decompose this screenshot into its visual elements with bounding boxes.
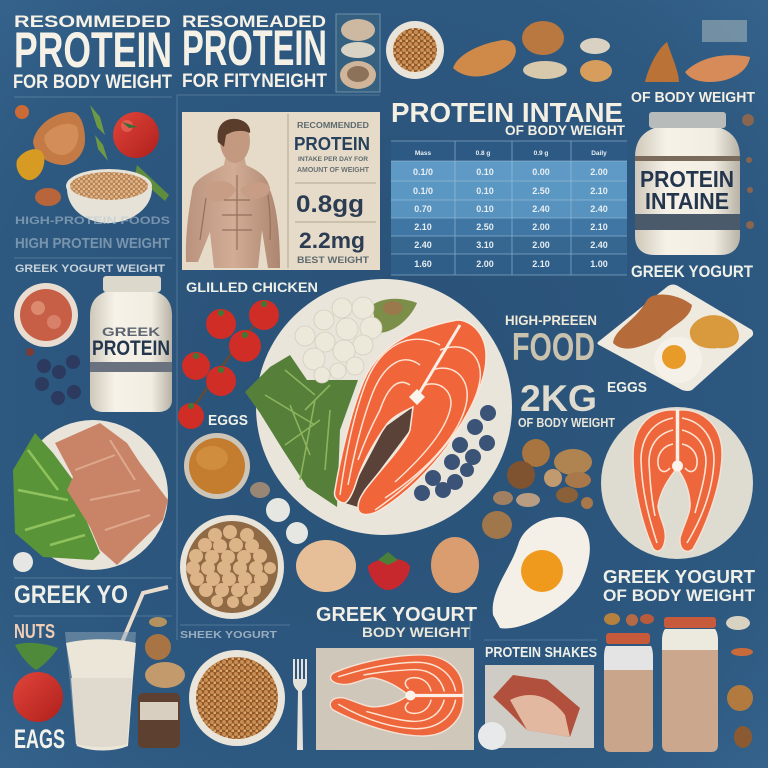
- table: protein intake: 2.00: [590, 167, 608, 177]
- table: protein intake: 2.00: [532, 240, 550, 250]
- table: protein intake: 0.8 g: [476, 150, 490, 157]
- jar: greek protein: PROTEIN: [92, 337, 170, 360]
- heading: recommended protein for body weight: [13, 12, 172, 93]
- jar: greek protein: GREEK: [102, 325, 160, 339]
- divider lines: [14, 95, 597, 640]
- panel: meat photo card: [478, 665, 594, 750]
- small badges: [13, 498, 308, 572]
- table: protein intake: 0.10: [476, 186, 494, 196]
- food: cherry tomatoes on vine: [178, 300, 279, 429]
- table: protein intake: 0.00: [532, 167, 550, 177]
- label: high-protein food: [505, 312, 597, 369]
- label: 2 kg of body weight: 2KG: [520, 378, 597, 419]
- table: protein intake: 0.70: [414, 204, 432, 214]
- card text: BEST WEIGHT: [297, 255, 370, 265]
- table: protein intake: 0.1/0: [413, 186, 433, 196]
- label: of body weight top right: OF BODY WEIGHT: [631, 89, 755, 106]
- food: meat with greens plate: [13, 420, 168, 570]
- food: blueberries: [26, 348, 81, 405]
- label: 2 kg of body weight: [518, 378, 615, 430]
- food: lentil bowl: [189, 650, 285, 746]
- jar: protein intake: PROTEIN: [640, 166, 734, 192]
- food: fried egg: [493, 517, 590, 628]
- table: protein intake: 2.10: [414, 222, 432, 232]
- table: protein intake: 0.1/0: [413, 167, 433, 177]
- table: protein intake: 2.40: [414, 240, 432, 250]
- card text: PROTEIN: [294, 134, 370, 154]
- food: salmon steak plate: [601, 407, 753, 559]
- panel: athlete protein card: [182, 112, 380, 270]
- jar: greek protein: [90, 276, 172, 412]
- blueberries: [414, 405, 496, 501]
- label: greek yogurt of body weight: [603, 567, 756, 605]
- label: greek weight: GREEK YOGURT WEIGHT: [15, 263, 165, 275]
- mozzarella: [295, 297, 382, 383]
- label: eags: EAGS: [14, 724, 65, 754]
- food: apple with leaves: [13, 643, 63, 722]
- table: protein intake: Mass: [415, 150, 432, 157]
- heading: recommended protein for fitness: PROTEIN: [182, 20, 327, 76]
- panel: salmon fillet card: [316, 648, 474, 750]
- table: protein intake: 2.00: [532, 222, 550, 232]
- panel: foods and grain bowl: [15, 105, 169, 223]
- heading: recommended protein for body weight: PROTEIN: [14, 22, 172, 78]
- food: honey cup: [184, 433, 250, 499]
- jar: protein intake: INTAINE: [645, 188, 729, 214]
- food: whole eggs and strawberry: [296, 537, 479, 593]
- panel: small food strip: [336, 14, 380, 92]
- table: protein intake: 2.50: [532, 186, 550, 196]
- table: protein intake: 2.10: [590, 186, 608, 196]
- food: small nuts above jars: [604, 613, 654, 626]
- side decoration: [742, 114, 754, 229]
- label: high-protein food: FOOD: [512, 326, 595, 369]
- greens: [245, 355, 358, 507]
- table: protein intake: Daily: [591, 150, 607, 157]
- table: protein intake: 1.00: [590, 259, 608, 269]
- label: protein shakes: PROTEIN SHAKES: [485, 644, 597, 661]
- label: greek yogurt center: GREEK YOGURT: [316, 604, 477, 626]
- food: nut and jar column: [138, 617, 185, 748]
- label: grilled chicken: GLILLED CHICKEN: [186, 279, 318, 295]
- heading: protein intake: PROTEIN INTANE: [391, 97, 623, 128]
- icon: fork: [293, 659, 307, 750]
- label: high-protein food: HIGH-PREEEN: [505, 312, 597, 328]
- table: protein intake: 2.00: [476, 259, 494, 269]
- card text: [294, 121, 370, 265]
- table: protein intake: 2.10: [590, 222, 608, 232]
- label: greek you left: GREEK YO: [14, 581, 128, 609]
- heading: recommended protein for body weight: FOR BODY WEIGHT: [13, 72, 172, 93]
- label: greek yogurt of body weight: OF BODY WEIGHT: [603, 586, 756, 605]
- caption: blurred small text block: HIGH PROTEIN WEIGHT: [15, 235, 170, 252]
- heading: recommended protein for body weight: RESOMMEDED: [14, 12, 171, 31]
- food: central plate with salmon: [245, 279, 512, 535]
- label: body weight center: BODY WEIGHT: [362, 624, 470, 640]
- card text: RECOMMENDED: [297, 121, 369, 130]
- label: nuts: NUTS: [14, 621, 55, 643]
- figure: muscular man: [186, 119, 280, 268]
- label: 2 kg of body weight: OF BODY WEIGHT: [518, 415, 615, 430]
- card text: AMOUNT OF WEIGHT: [297, 167, 370, 174]
- table: protein intake: [391, 141, 627, 275]
- heading: recommended protein for fitness: FOR FITYNEIGHT: [182, 71, 327, 92]
- table: protein intake: 2.40: [590, 240, 608, 250]
- label: eggs right: EGGS: [607, 379, 647, 396]
- top row foods: [386, 20, 750, 82]
- table: protein intake: 3.10: [476, 240, 494, 250]
- jar: protein intake: [635, 112, 740, 255]
- food: nuts: [482, 439, 593, 539]
- subheading: of body weight: OF BODY WEIGHT: [505, 122, 625, 138]
- card text: INTAKE PER DAY FOR: [298, 156, 368, 163]
- faint label: SHEEK YOGURT: [180, 630, 277, 641]
- table: protein intake: 0.9 g: [534, 150, 548, 157]
- caption: blurred small text block: [15, 215, 170, 252]
- label: greek yogurt of body weight: GREEK YOGURT: [603, 567, 755, 587]
- food: meat bowl left: [14, 283, 78, 347]
- heading: recommended protein for fitness: RESOMEADED: [182, 12, 326, 31]
- table: protein intake: 2.40: [590, 204, 608, 214]
- table: protein intake: 2.40: [532, 204, 550, 214]
- table: protein intake: 0.10: [476, 167, 494, 177]
- table: protein intake: 0.10: [476, 204, 494, 214]
- salmon: [335, 320, 486, 515]
- caption: blurred small text block: HIGH-PROTEIN FOODS: [15, 215, 170, 227]
- food: chickpea bowl: [180, 515, 284, 619]
- card text: 2.2mg: [299, 228, 365, 253]
- food: meal tray with egg: [597, 284, 753, 391]
- table: protein intake: 2.50: [476, 222, 494, 232]
- table: protein intake: 1.60: [414, 259, 432, 269]
- table: protein intake: 2.10: [532, 259, 550, 269]
- jars: protein shakes: [604, 617, 718, 752]
- label: greek yogurt right: GREEK YOGURT: [631, 262, 754, 281]
- card text: 0.8gg: [296, 191, 364, 218]
- food: milk glass with straw: [65, 587, 168, 750]
- label: eggs center: EGGS: [208, 412, 248, 429]
- food: small items right edge: [726, 616, 753, 748]
- heading: recommended protein for fitness: [182, 12, 327, 92]
